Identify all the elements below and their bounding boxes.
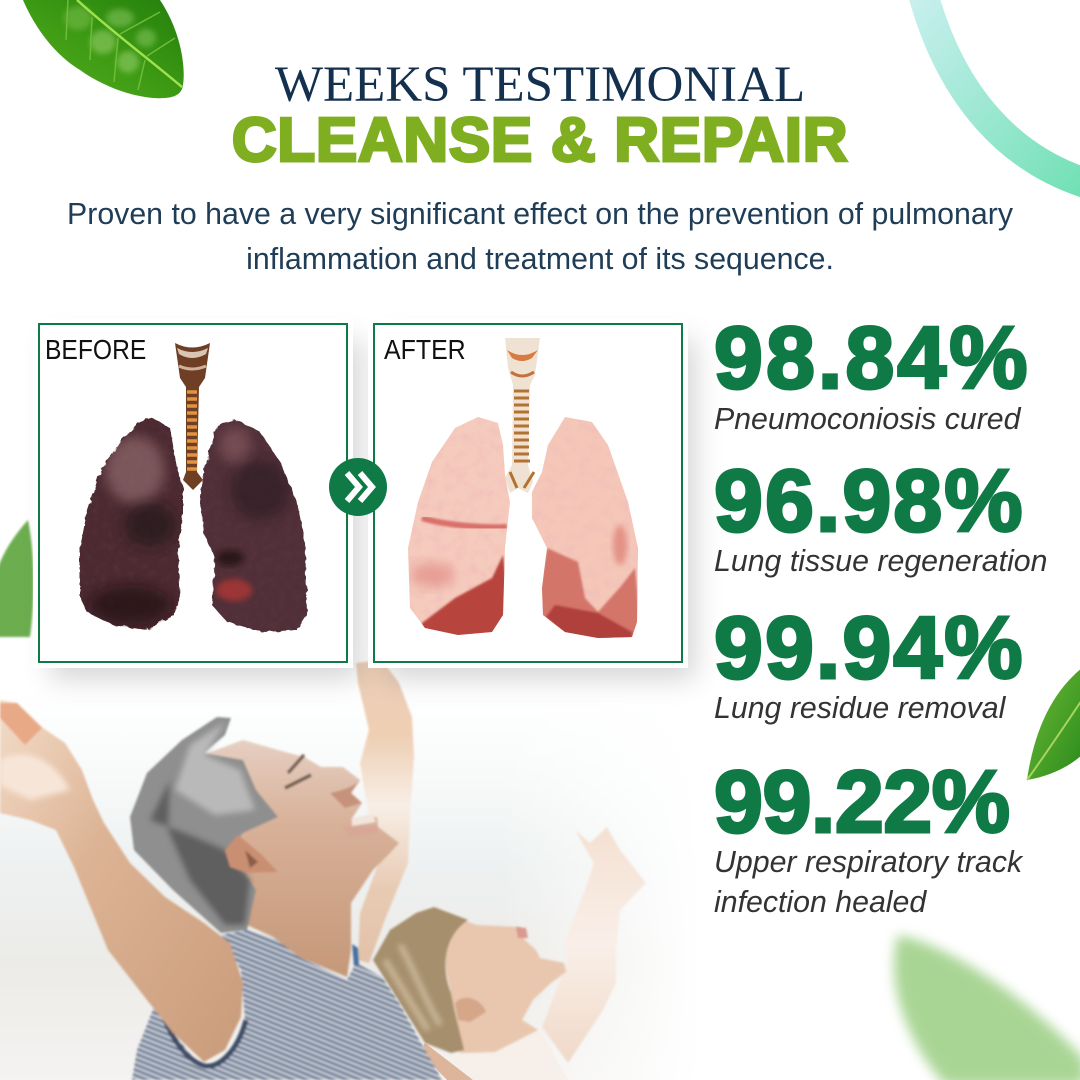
decoration: teal arc top right <box>909 0 1080 198</box>
intro text <box>67 198 1013 276</box>
stat: 99.94%: 99.94% <box>714 598 1024 697</box>
panel: before <box>38 323 348 663</box>
left lobe base <box>421 554 504 635</box>
label: before: BEFORE <box>45 334 146 365</box>
lungs: after <box>408 338 638 638</box>
stat: 96.98%: 96.98% <box>714 451 1024 550</box>
label: after: AFTER <box>384 334 466 365</box>
man <box>0 700 442 1080</box>
hair <box>130 717 278 933</box>
man's raised far arm <box>356 660 414 963</box>
intro text: inflammation and treatment of its sequence. <box>246 243 834 276</box>
neck and face <box>208 740 399 977</box>
sleeve band <box>165 1020 246 1066</box>
ear <box>225 835 278 873</box>
stat: 98.84%: 98.84% <box>714 308 1030 407</box>
arrow icon <box>329 458 387 516</box>
stat: 99.22%: 99.22% <box>714 752 1009 851</box>
woman <box>373 827 646 1080</box>
stat label: upper respiratory: Upper respiratory track <box>714 846 1022 879</box>
windpipe <box>175 343 210 490</box>
decoration: blurred leaf left <box>0 519 33 639</box>
stat label: lung tissue: Lung tissue regeneration <box>714 545 1048 578</box>
brow and eye <box>285 755 311 788</box>
panel: after <box>373 323 683 663</box>
decoration: leaf right <box>1026 670 1080 781</box>
right lobe red zone <box>540 548 640 640</box>
stat label: upper respiratory: infection healed <box>714 886 926 919</box>
windpipe <box>505 338 540 493</box>
decoration: blurred leaf bottom right <box>886 929 1080 1080</box>
shirt <box>132 930 442 1080</box>
near arm <box>0 700 243 1062</box>
lungs: before <box>79 343 308 632</box>
stat label: upper respiratory <box>714 846 1024 919</box>
stat label: pneumoconiosis: Pneumoconiosis cured <box>714 403 1021 436</box>
decoration: leaf top left <box>23 0 184 98</box>
heading: cleanse and repair: CLEANSE & REPAIR <box>232 106 848 175</box>
stat label: lung residue: Lung residue removal <box>714 692 1005 725</box>
intro text: Proven to have a very significant effect on the prevention of pulmonary <box>67 198 1013 231</box>
title: weeks testimonial: WEEKS TESTIMONIAL <box>275 57 805 113</box>
